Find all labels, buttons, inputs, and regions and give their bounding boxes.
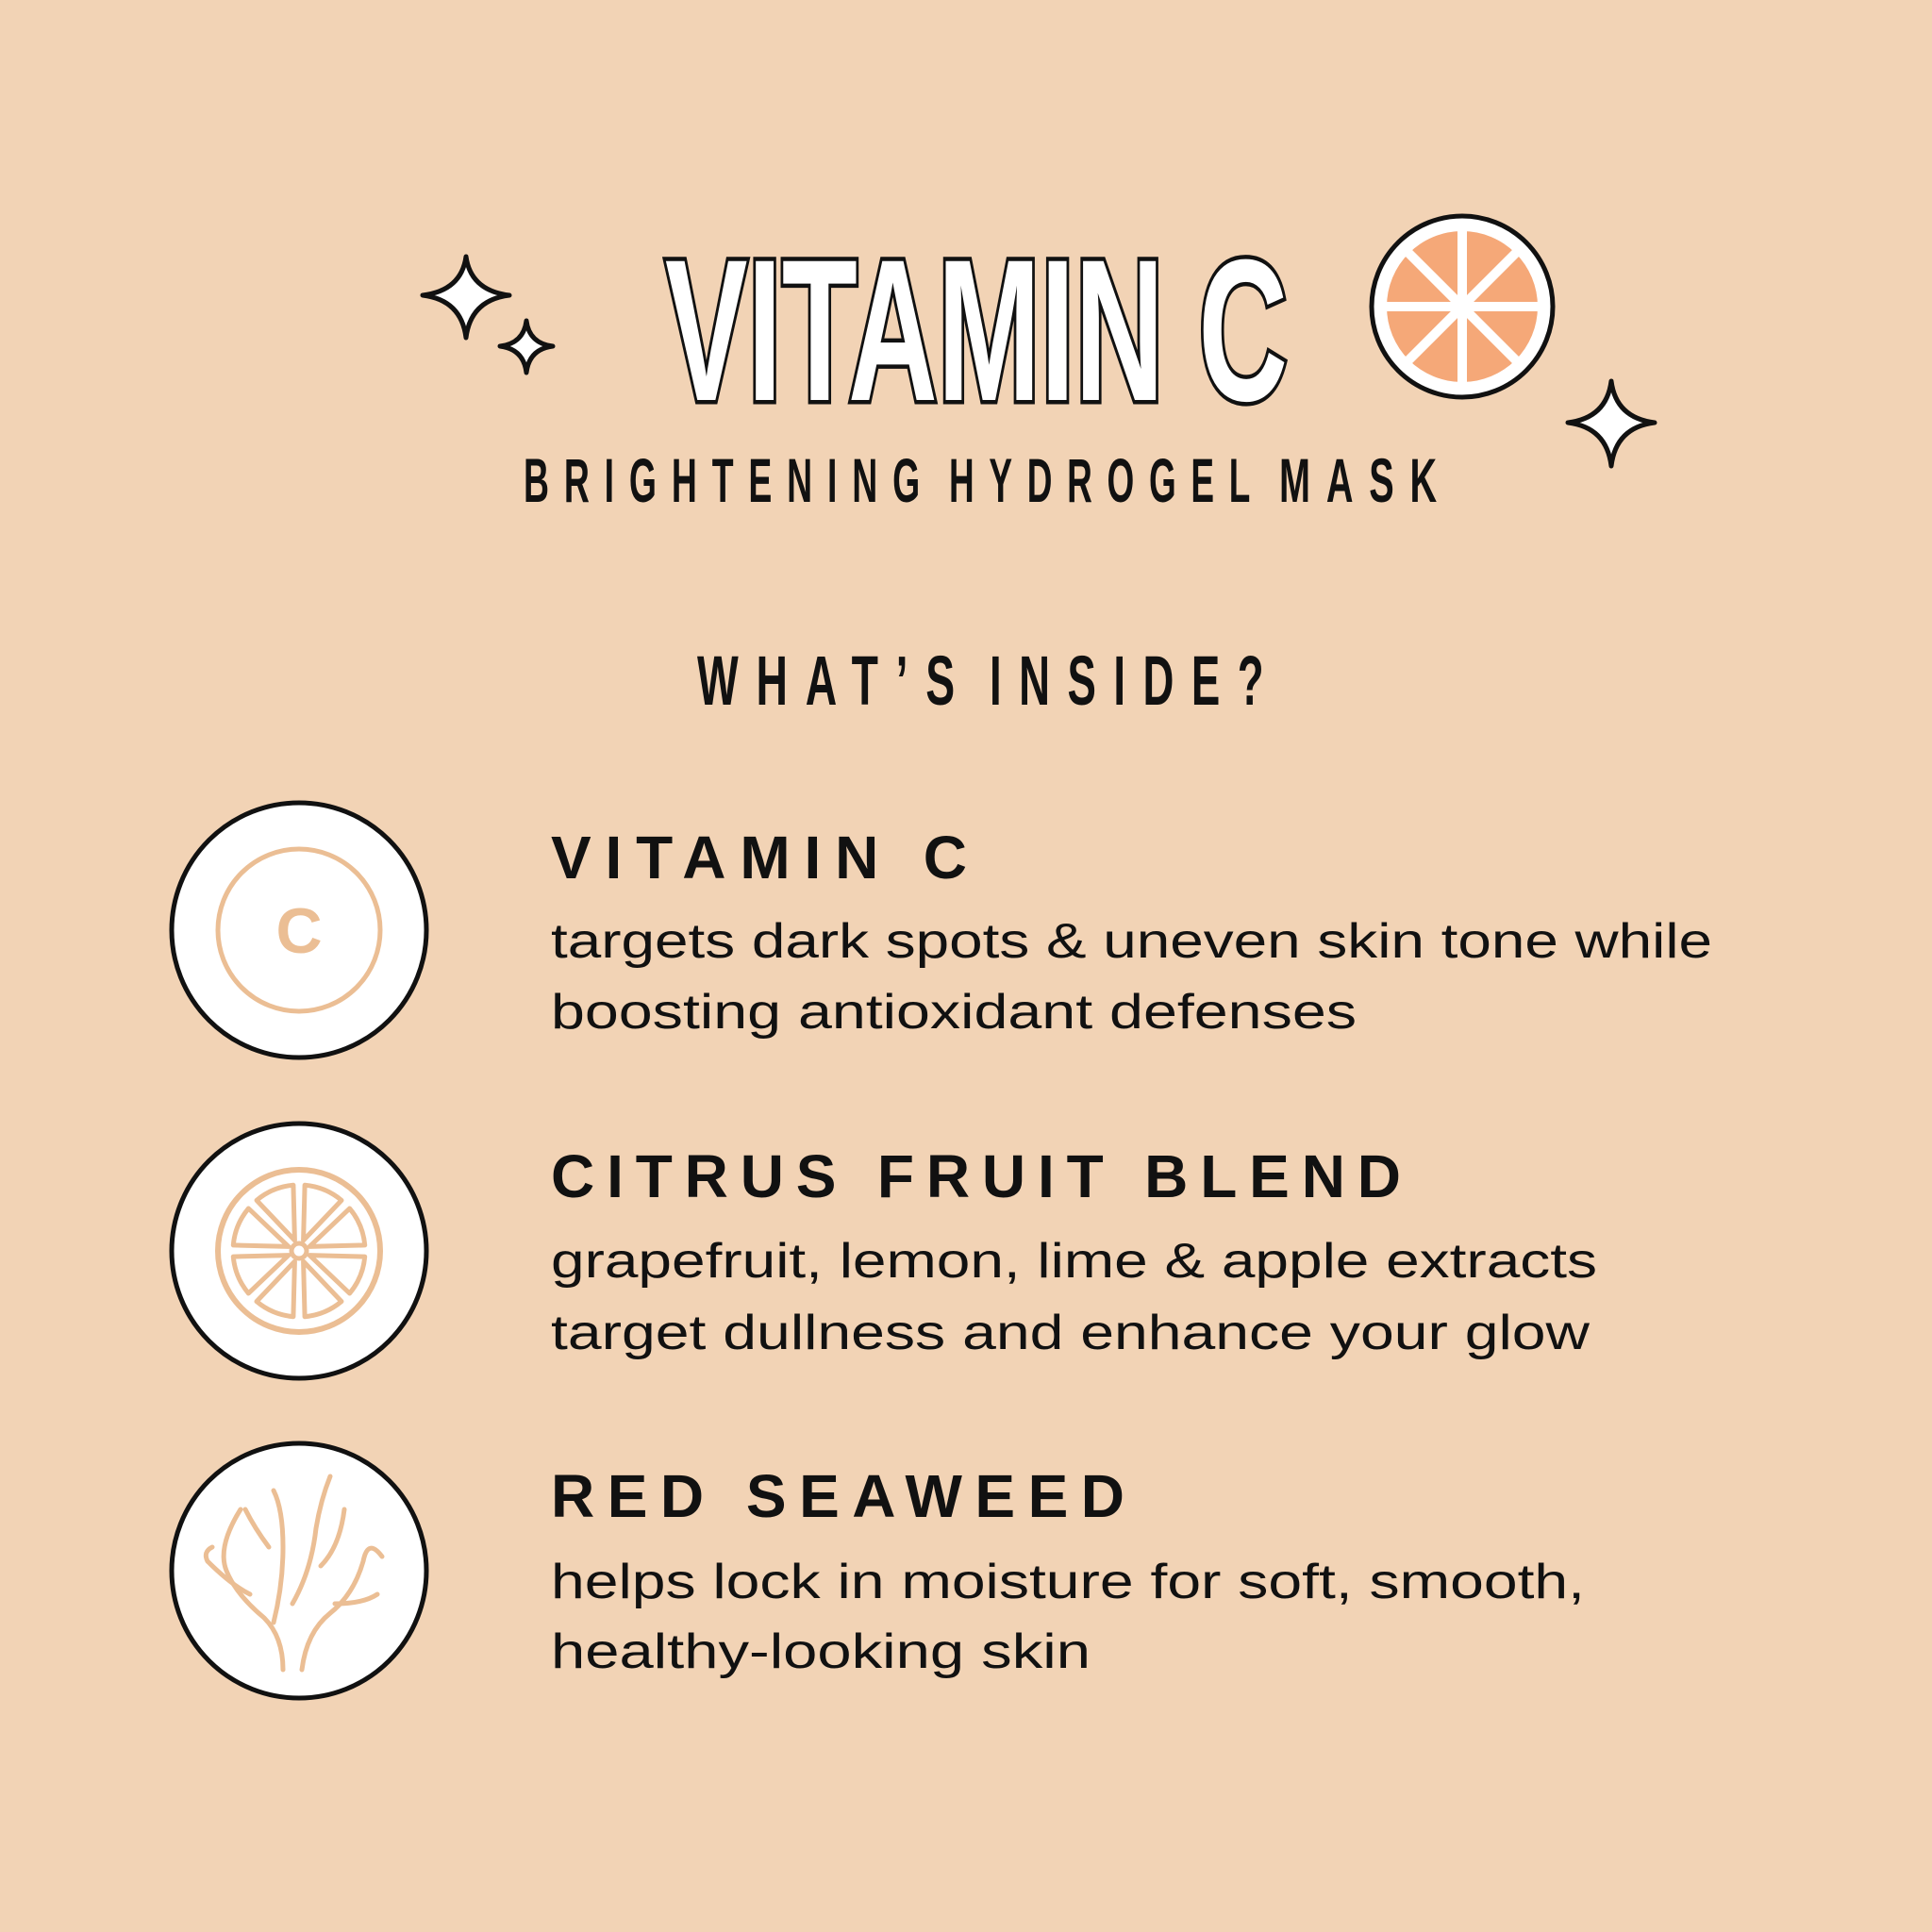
text: vitamin c description: targets dark spots & uneven skin tone while — [551, 914, 1712, 969]
panel: vitamin c — [172, 803, 1712, 1058]
text: seaweed description: healthy-looking skin — [551, 1624, 1091, 1679]
heading: what's inside: WHAT’S — [697, 641, 973, 720]
subtitle: BRIGHTENING — [524, 445, 935, 515]
title: VITAMIN C — [665, 218, 1288, 443]
subtitle: MASK — [1279, 445, 1453, 515]
heading: red seaweed: RED SEAWEED — [551, 1462, 1124, 1530]
icon: seaweed circle — [172, 1443, 426, 1698]
panel: citrus — [172, 1124, 1597, 1378]
heading: what's inside: INSIDE? — [990, 641, 1281, 720]
text: vitamin c description: boosting antioxidant defenses — [551, 985, 1357, 1040]
text: citrus description — [551, 1234, 1597, 1360]
icon: sparkle large left — [423, 257, 509, 338]
panel: red seaweed — [172, 1443, 1585, 1698]
text: vitamin c description — [551, 914, 1712, 1040]
subtitle: HYDROGEL — [949, 445, 1265, 515]
icon: sparkle right — [1568, 381, 1655, 466]
icon: orange slice — [1372, 216, 1553, 397]
text: seaweed description: helps lock in moisture for soft, smooth, — [551, 1555, 1585, 1609]
icon: citrus circle — [172, 1124, 426, 1378]
icon: sparkle small left — [500, 321, 553, 373]
text: citrus description: target dullness and enhance your glow — [551, 1306, 1591, 1360]
heading: citrus fruit blend: CITRUS FRUIT BLEND — [551, 1142, 1401, 1210]
icon: vitamin c circle: C — [275, 895, 323, 967]
text: seaweed description — [551, 1555, 1585, 1679]
heading: vitamin c: VITAMIN C — [551, 824, 967, 891]
text: citrus description: grapefruit, lemon, lime & apple extracts — [551, 1234, 1597, 1289]
icon: vitamin c circle — [172, 803, 426, 1058]
